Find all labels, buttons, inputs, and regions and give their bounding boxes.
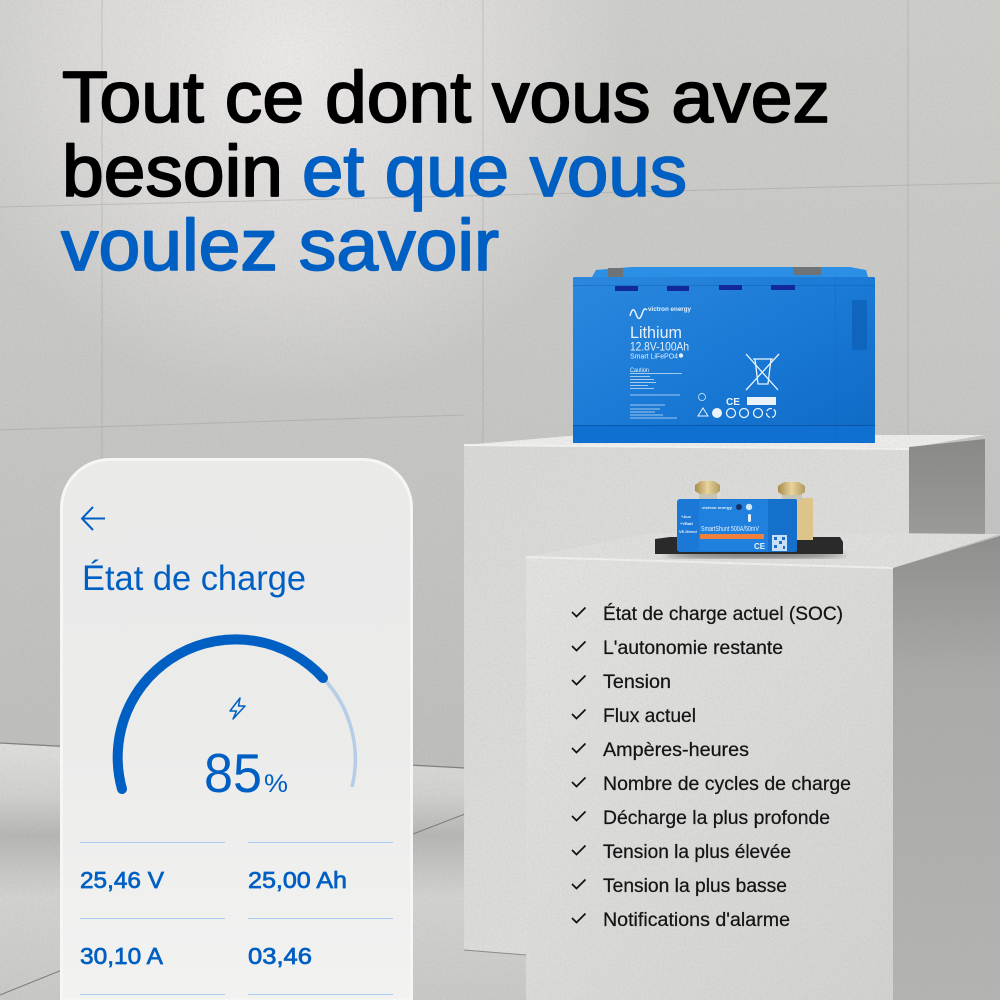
title: besoin bbox=[62, 132, 283, 212]
shunt labels: +Aux bbox=[681, 514, 692, 519]
battery label: 12.8V-100Ah bbox=[630, 340, 689, 354]
checklist labels: Nombre de cycles de charge bbox=[603, 773, 851, 795]
battery monitor: SmartShunt bbox=[655, 481, 845, 558]
checklist labels: Flux actuel bbox=[603, 705, 696, 727]
shunt labels: SmartShunt 500A/50mV bbox=[701, 526, 759, 533]
battery body bbox=[573, 277, 875, 443]
checklist labels: Décharge la plus profonde bbox=[603, 807, 830, 829]
back pedestal bbox=[464, 435, 985, 955]
floor bbox=[0, 743, 530, 1000]
stat dividers bbox=[80, 842, 393, 994]
gauge value: 85 bbox=[204, 742, 262, 804]
icon: crossed-out recycling bin bbox=[746, 354, 779, 390]
stat values: 30,10 A bbox=[80, 943, 164, 969]
shunt labels: VE.Direct bbox=[679, 529, 697, 534]
checklist labels: Tension bbox=[603, 671, 671, 693]
checklist labels bbox=[603, 602, 851, 931]
battery label bbox=[630, 306, 691, 418]
shunt orange bar bbox=[700, 534, 764, 539]
shunt body bbox=[677, 499, 797, 552]
shunt labels bbox=[679, 504, 787, 551]
shunt base bbox=[655, 537, 843, 554]
stat values bbox=[80, 867, 347, 969]
brass bolts bbox=[695, 481, 813, 540]
checklist labels: État de charge actuel (SOC) bbox=[603, 602, 843, 625]
front pedestal bbox=[526, 533, 1000, 1000]
stat values: 25,00 Ah bbox=[248, 867, 347, 893]
icons: check marks bbox=[572, 608, 586, 922]
shunt labels: CE bbox=[754, 542, 766, 551]
certification marks: CE bbox=[726, 397, 740, 408]
title: Tout ce dont vous avez bbox=[62, 58, 830, 138]
battery label: victron energy bbox=[648, 306, 691, 313]
battery label: Lithium bbox=[630, 323, 682, 342]
battery bbox=[573, 267, 875, 443]
title bbox=[61, 58, 830, 286]
icon: lightning bolt bbox=[230, 698, 245, 719]
card heading: État de charge bbox=[82, 559, 306, 598]
checklist bbox=[572, 602, 851, 931]
icon: back arrow bbox=[82, 507, 105, 530]
checklist labels: Tension la plus basse bbox=[603, 875, 787, 897]
shunt labels: victron energy bbox=[702, 505, 733, 510]
battery lid and terminals bbox=[592, 267, 868, 277]
stat values: 25,46 V bbox=[80, 867, 165, 893]
certification marks bbox=[698, 394, 776, 418]
stat values: 03,46 bbox=[248, 943, 312, 969]
title: voulez savoir bbox=[61, 206, 499, 286]
battery label: Caution bbox=[630, 368, 649, 374]
checklist labels: Ampères-heures bbox=[603, 739, 749, 761]
panel: app card bbox=[62, 460, 412, 1000]
gauge value: % bbox=[264, 770, 288, 798]
checklist labels: L'autonomie restante bbox=[603, 637, 783, 659]
shunt labels: +VBatt bbox=[680, 521, 693, 526]
gauge bbox=[118, 639, 355, 789]
battery label: Smart LiFePO4 bbox=[630, 352, 678, 360]
checklist labels: Notifications d'alarme bbox=[603, 909, 790, 931]
title: et que vous bbox=[302, 132, 687, 212]
checklist labels: Tension la plus élevée bbox=[603, 841, 791, 863]
